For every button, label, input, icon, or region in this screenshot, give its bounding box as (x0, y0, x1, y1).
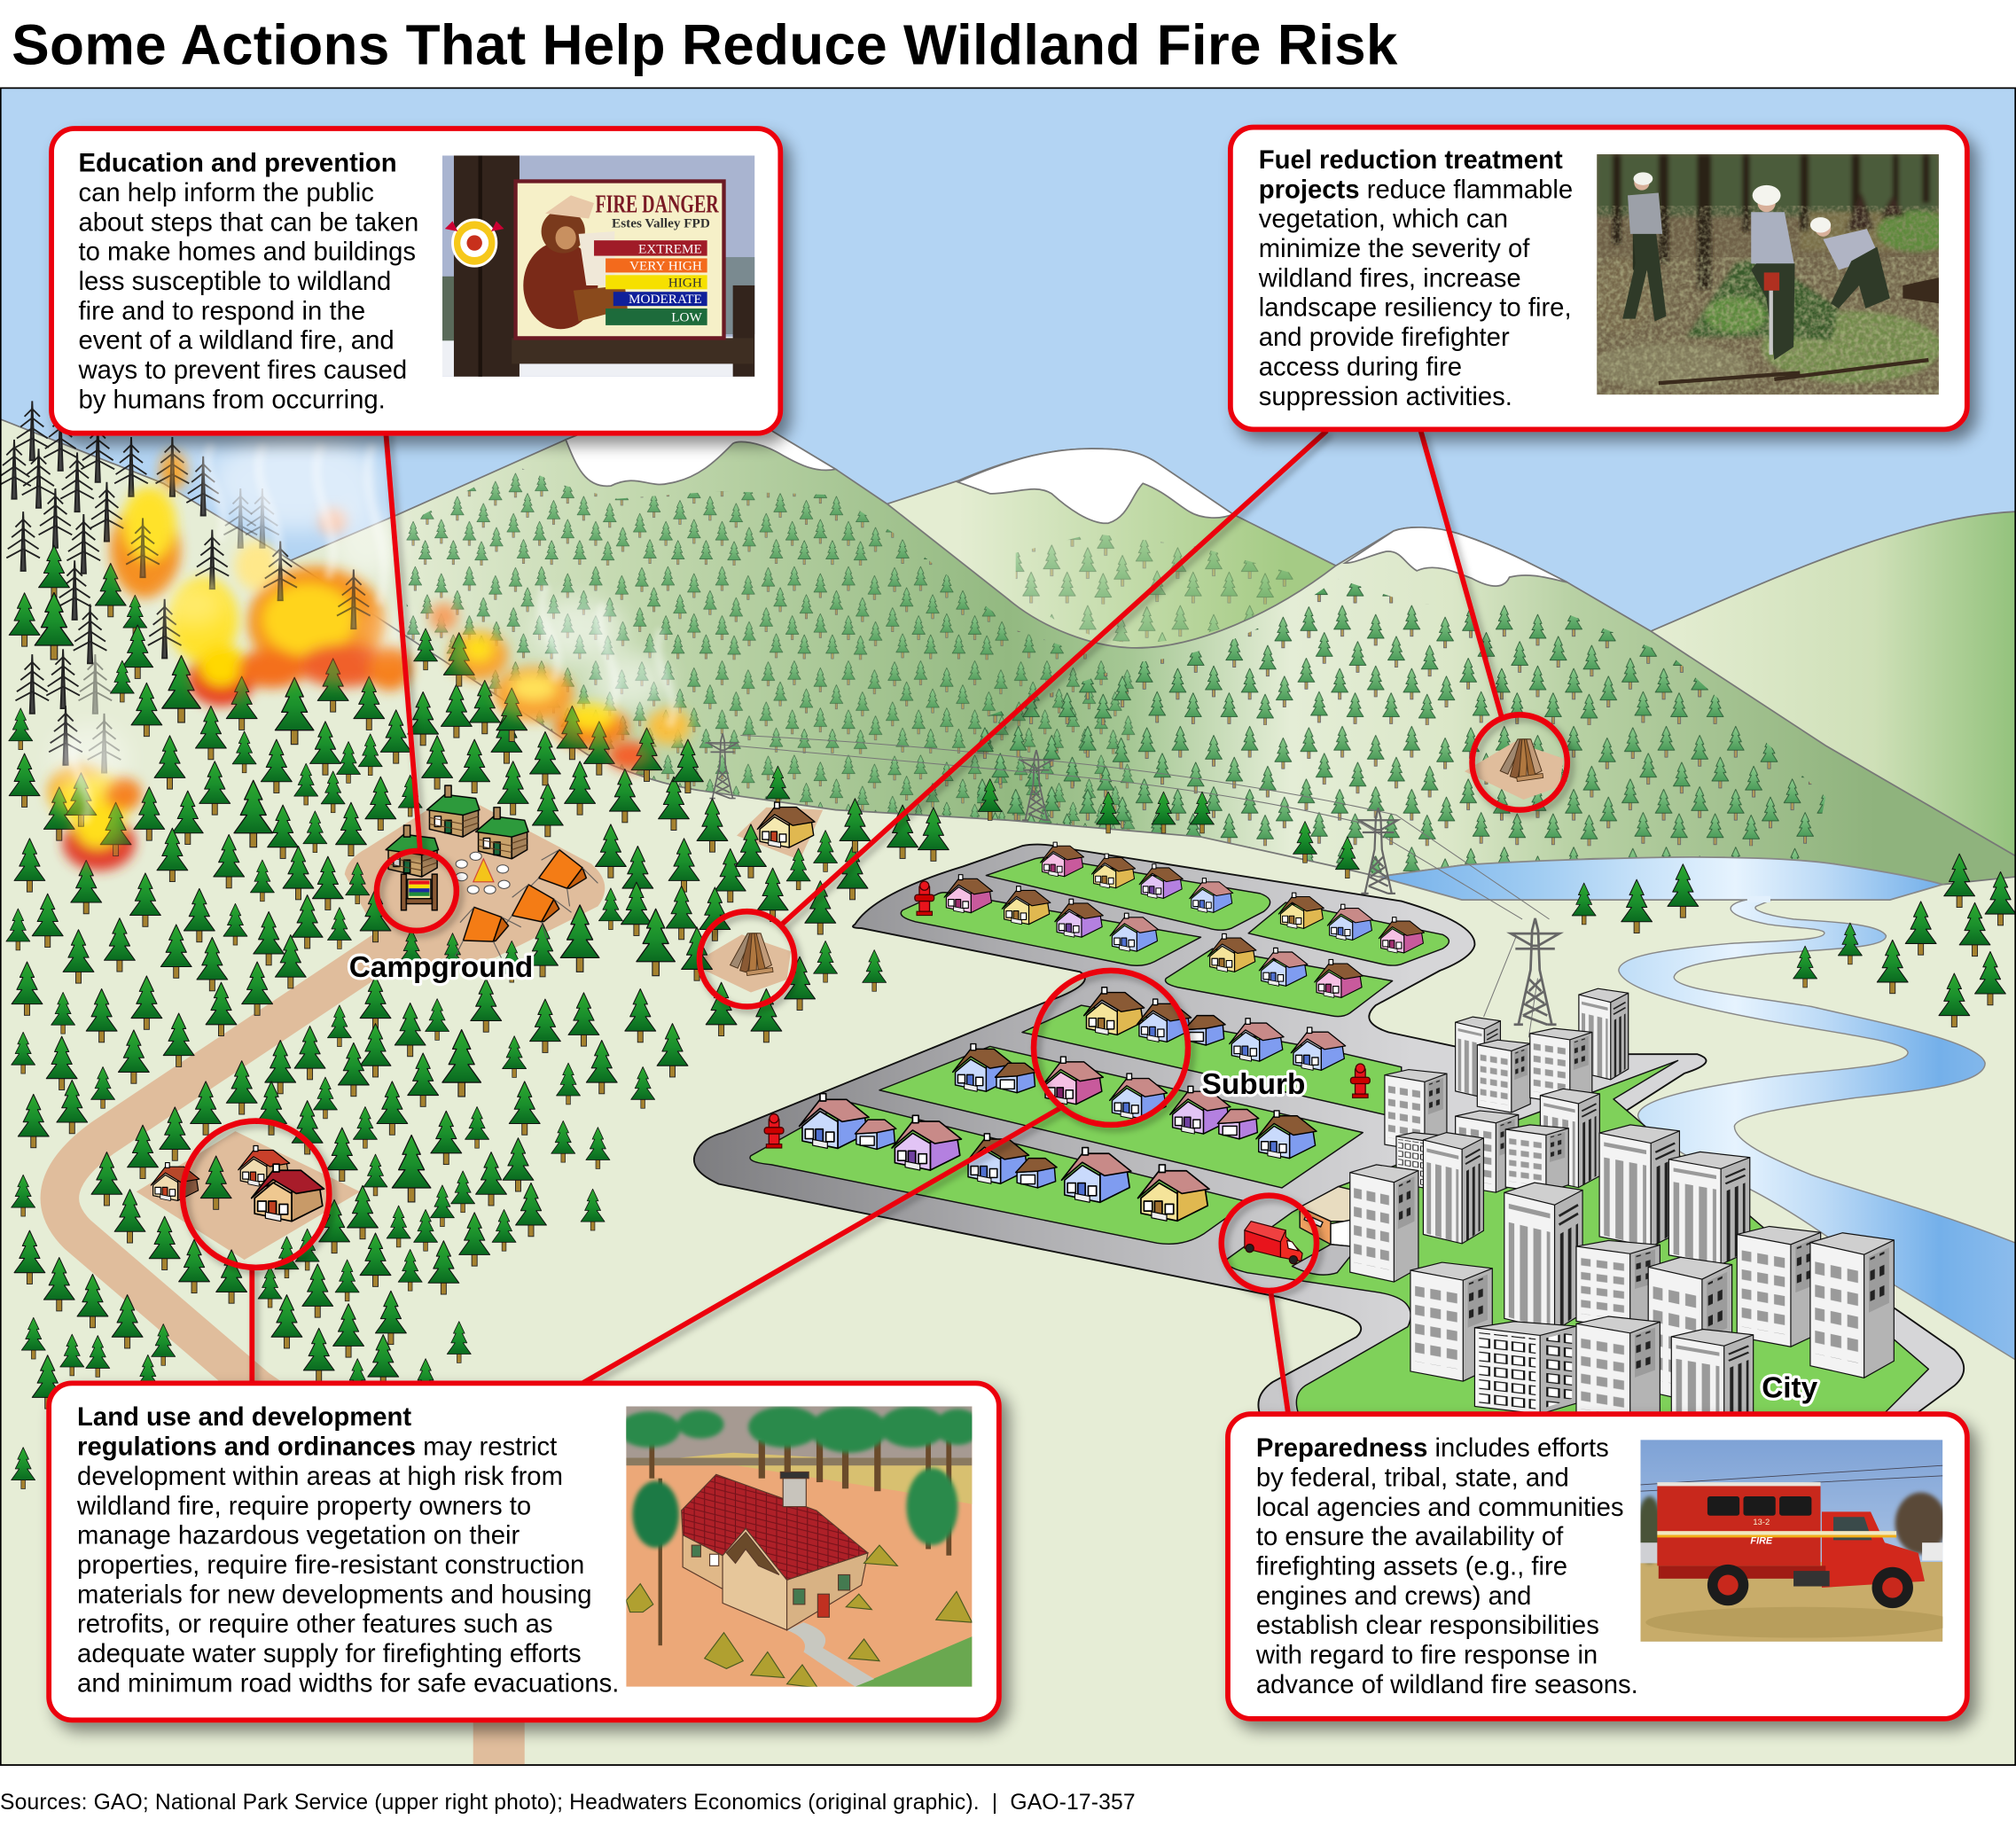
callout text: reduce flammable (1360, 176, 1573, 204)
homestead clearing (137, 1131, 360, 1260)
left mountain snow (565, 431, 838, 488)
river (1619, 900, 2016, 1360)
far right hill (1651, 511, 2014, 855)
callout box (1231, 128, 1967, 429)
title: Some Actions That Help Reduce Wildland Fire Risk (12, 13, 1398, 77)
callout text: regulations and ordinances (77, 1433, 416, 1462)
foreground ground (0, 419, 2016, 1765)
callout text: vegetation, which can (1259, 206, 1508, 234)
callout text: wildland fire, require property owners to (76, 1492, 531, 1520)
main mountain range (291, 431, 2014, 884)
fuel treatment piles (731, 739, 1543, 975)
callout text: retrofits, or require other features such as (77, 1611, 553, 1639)
callout box (1228, 1414, 1967, 1719)
callout text: less susceptible to wildland (79, 268, 391, 296)
houses, lower rows (800, 988, 1346, 1221)
callout text: properties, require fire-resistant construction (77, 1551, 584, 1580)
gravel road to campground and homestead (59, 932, 499, 1765)
callout text: ways to prevent fires caused (78, 356, 407, 385)
photo: fire danger sign: MODERATE (629, 292, 702, 307)
photo: red fire truck: FIRE (1750, 1536, 1773, 1547)
callout text: fire and to respond in the (79, 297, 365, 325)
mountain trees: middle mountain (1016, 534, 1311, 643)
green lots (750, 857, 1928, 1414)
callout text: engines and crews) and (1256, 1582, 1531, 1611)
label: Campground: Campground (349, 951, 533, 984)
highlight circles (183, 714, 1567, 1291)
houses, upper rows (944, 842, 1424, 997)
image: fire-wise house illustration (619, 1407, 981, 1688)
callout text: establish clear responsibilities (1256, 1612, 1599, 1640)
callout text: to ensure the availability of (1256, 1523, 1564, 1551)
mountain trees: right range (977, 579, 1825, 874)
campfire ring (456, 852, 510, 894)
callout text: wildland fires, increase (1258, 264, 1521, 293)
callout box (51, 129, 780, 433)
callout text: adequate water supply for firefighting efforts (77, 1640, 582, 1668)
photo: red fire truck (1637, 1440, 1954, 1642)
callout text: projects (1259, 176, 1360, 204)
callout text: by humans from occurring. (79, 386, 386, 414)
power line wires (705, 736, 1550, 1037)
callout: fuel reduction treatment projects (1231, 128, 1967, 429)
sky (2, 89, 2014, 630)
campground cabins (386, 785, 528, 877)
callout text: to make homes and buildings (79, 238, 416, 267)
campground tents (442, 850, 598, 972)
power line towers (707, 733, 1559, 1025)
photo: fire danger sign: Estes Valley FPD (612, 216, 710, 231)
fire glow, large and slope blazes (49, 452, 689, 869)
smoke plumes (51, 433, 668, 792)
photo: fire danger sign: FIRE DANGER (595, 190, 719, 218)
callout text: Land use and development (77, 1403, 411, 1432)
callout text: can help inform the public (79, 179, 374, 207)
photo: fire danger sign: LOW (671, 310, 702, 325)
callout text: by federal, tribal, state, and (1256, 1464, 1569, 1492)
fire hydrants (764, 881, 1370, 1148)
callout text: local agencies and communities (1256, 1494, 1623, 1522)
callout text: Education and prevention (79, 150, 397, 178)
callout text: manage hazardous vegetation on their (77, 1522, 520, 1550)
callout text: advance of wildland fire seasons. (1256, 1671, 1638, 1699)
callout: land use and development regulations (49, 1383, 999, 1720)
callout text: event of a wildland fire, and (79, 327, 395, 355)
callout text: landscape resiliency to fire, (1259, 294, 1572, 323)
lake to river join (1747, 896, 1770, 902)
callout: preparedness (1228, 1414, 1967, 1719)
callout text: firefighting assets (e.g., fire (1256, 1552, 1567, 1581)
callout box (49, 1383, 999, 1720)
photo: fuel reduction crew (1588, 154, 1954, 394)
photo: red fire truck: 13-2 (1753, 1517, 1770, 1526)
campground clearing (345, 797, 605, 967)
fire station (1292, 1187, 1365, 1275)
photo: fire danger sign: HIGH (668, 275, 702, 290)
lone house near forest (757, 802, 815, 847)
forest trees (6, 545, 2016, 1488)
city buildings (1350, 988, 1894, 1441)
photo: fire danger sign: VERY HIGH (629, 259, 702, 274)
source note: Sources: GAO; National Park Service (upper right photo); Headwaters Economics (original graphic). | GAO-17-357 (0, 1791, 1136, 1815)
label: City: City (1762, 1371, 1818, 1404)
callout: education and prevention (51, 129, 780, 433)
callout text: development within areas at high risk from (77, 1463, 563, 1491)
pointer lines (252, 431, 1502, 1414)
callout text: Fuel reduction treatment (1259, 146, 1563, 175)
callout text: may restrict (416, 1433, 557, 1462)
callout text: and minimum road widths for safe evacuations. (77, 1669, 619, 1698)
burned trees (0, 401, 371, 773)
callout text: access during fire (1259, 353, 1462, 381)
middle mountain (887, 448, 1336, 647)
suburb and city road network (694, 845, 1964, 1427)
road stub at panel bottom (473, 1671, 525, 1765)
label: Suburb: Suburb (1202, 1068, 1305, 1101)
right mountain snow (1345, 527, 1567, 586)
callout text: with regard to fire response in (1255, 1642, 1598, 1670)
callout text: Preparedness includes efforts (1256, 1434, 1609, 1463)
middle mountain snow (957, 449, 1233, 523)
fire danger mini sign (402, 874, 437, 910)
callout text: about steps that can be taken (79, 208, 418, 237)
photo: fire danger sign: EXTREME (638, 242, 702, 257)
callout text: minimize the severity of (1259, 235, 1530, 263)
fuel pile clearings (692, 742, 1563, 993)
callout text: suppression activities. (1259, 383, 1512, 411)
fire truck (1245, 1222, 1302, 1264)
tree inside homestead (200, 1156, 231, 1209)
homestead houses (151, 1146, 324, 1222)
fire glow over trees (49, 452, 689, 869)
lake (1379, 857, 1942, 900)
photo: fire danger sign (442, 155, 754, 377)
callout text: and provide firefighter (1259, 324, 1510, 352)
callout text: materials for new developments and housing (77, 1581, 592, 1609)
mountain trees: left range (405, 465, 1137, 836)
wavy smoke wisps (73, 443, 674, 823)
lone cabin clearing (737, 808, 823, 860)
